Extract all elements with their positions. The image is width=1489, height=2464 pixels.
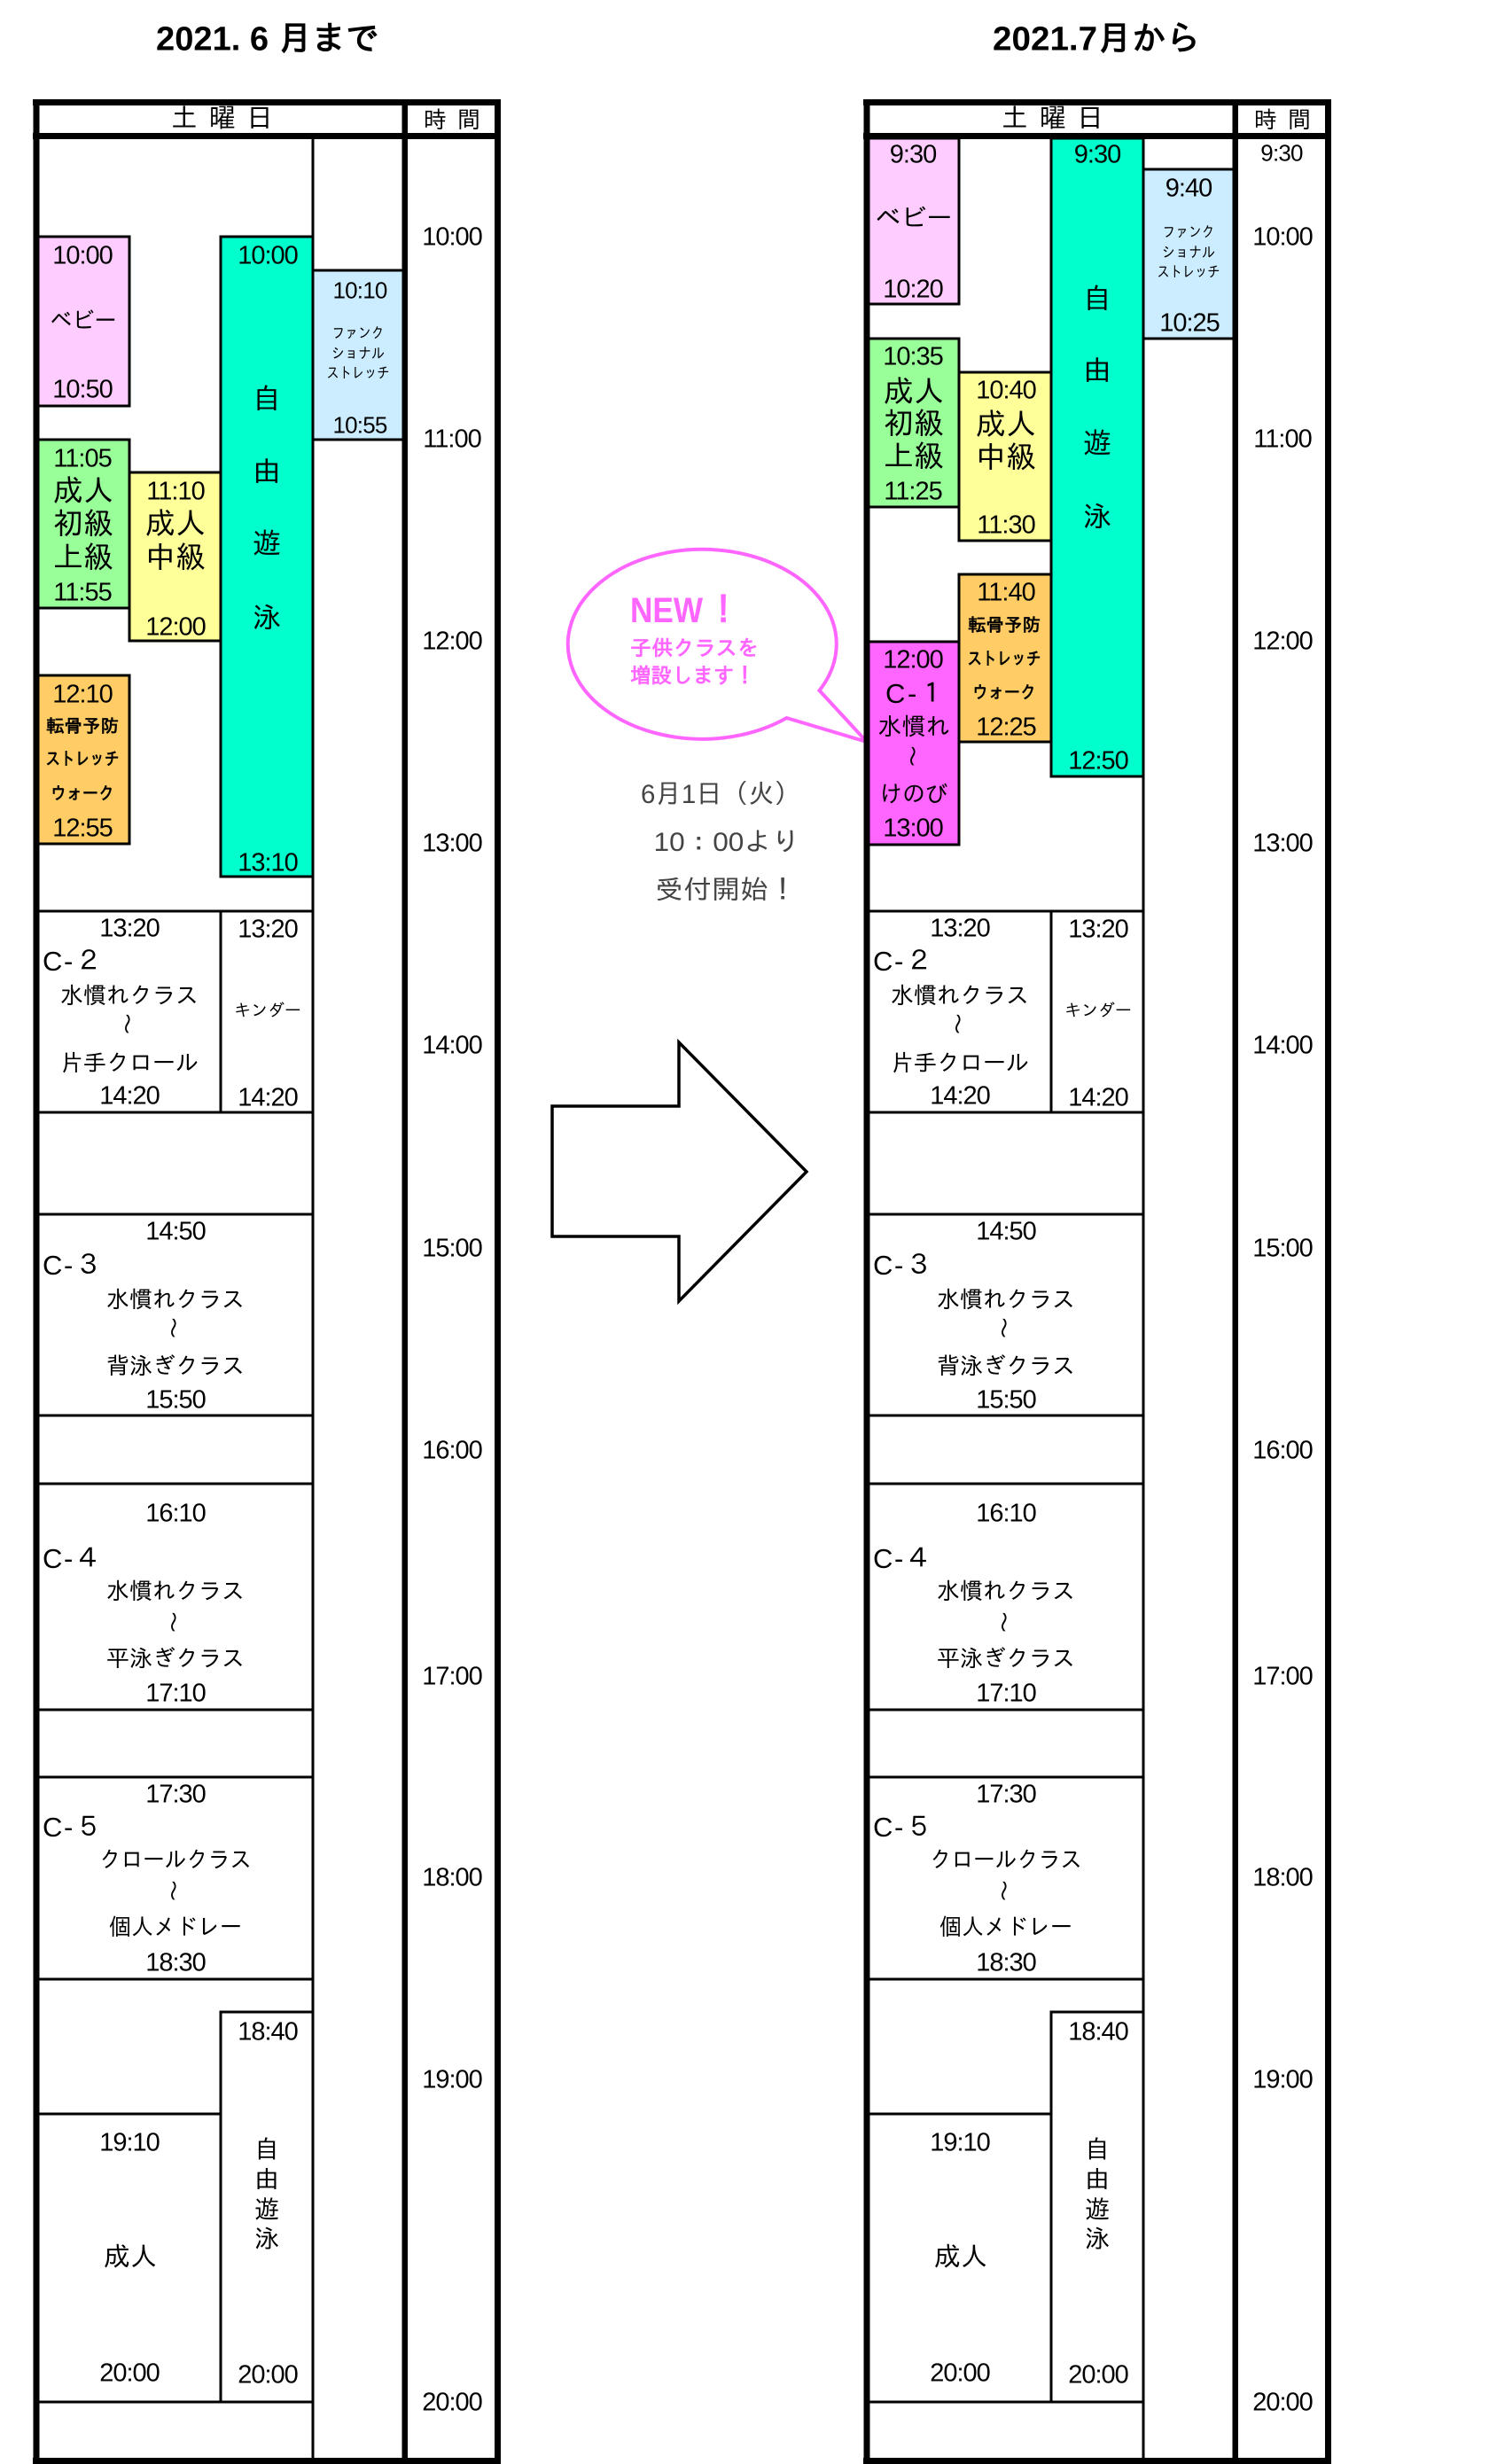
frame and header of left table <box>33 99 501 2464</box>
class: C-3: ～ <box>160 1316 186 1339</box>
class: C-2: C-２ <box>873 946 932 977</box>
class: C-1 new: ～ <box>899 745 925 768</box>
class: adult beginner and advanced: 初級 <box>884 408 944 441</box>
class: C-4: C-４ <box>873 1543 932 1574</box>
class: C-2: 水慣れクラス <box>60 982 199 1009</box>
title: until June 2021: 2021. 6 月まで <box>156 21 379 58</box>
class: evening free swim: 泳 <box>254 2225 279 2253</box>
class: baby: ベビー <box>50 308 117 334</box>
class: adult intermediate: 11:10 <box>146 477 205 505</box>
class: kinder: 13:20 <box>1068 915 1128 943</box>
panel: right timetable (from July) <box>863 99 1331 2464</box>
frame and header of left table: 曜 <box>209 105 236 133</box>
class: evening free swim: 遊 <box>254 2196 279 2223</box>
time axis right: 14:00 <box>1252 1032 1313 1060</box>
class: C-3: ～ <box>990 1316 1017 1339</box>
class: functional stretch: ショナル <box>331 346 385 362</box>
time axis left: 13:00 <box>422 830 482 858</box>
time axis left: 10:00 <box>422 223 482 252</box>
class: evening free swim: 泳 <box>1085 2225 1110 2253</box>
frame and header of right table: 時 <box>1254 106 1277 133</box>
text block: reception start date: 受付開始！ <box>655 876 797 905</box>
class: C-3: 水慣れクラス <box>937 1286 1075 1313</box>
class: C-3: 15:50 <box>976 1386 1036 1415</box>
frame and header of right table: 土 <box>1002 105 1028 133</box>
class: C-2: 片手クロール <box>891 1049 1029 1076</box>
class: adult evening: 成人 <box>104 2242 157 2273</box>
class: free swim: 9:30 <box>1074 140 1120 168</box>
time axis left: 12:00 <box>422 628 482 656</box>
class: C-3: C-３ <box>873 1250 932 1281</box>
class: adult intermediate: 10:40 <box>976 376 1036 404</box>
class: adult intermediate: 12:00 <box>145 613 206 642</box>
class: adult intermediate <box>959 372 1051 541</box>
class: baby <box>38 237 129 406</box>
class: evening free swim: 由 <box>1085 2166 1110 2193</box>
class: baby: 10:00 <box>52 241 113 269</box>
time axis right: 9:30 <box>1260 140 1303 167</box>
class: C-2: ～ <box>944 1012 971 1035</box>
class: adult evening: 20:00 <box>99 2359 160 2388</box>
callout: new children's class <box>568 550 867 742</box>
class: C-5: C-５ <box>43 1812 103 1843</box>
class: functional stretch: 10:10 <box>332 277 387 303</box>
class: C-1 new: けのび <box>879 781 948 807</box>
class: C-4: 平泳ぎクラス <box>106 1645 245 1672</box>
class: C-4 <box>38 1484 313 1710</box>
class: C-1 new: C-１ <box>885 678 946 709</box>
class: C-5: 個人メドレー <box>939 1914 1072 1940</box>
class: adult evening: 成人 <box>934 2242 987 2273</box>
time axis right: 10:00 <box>1252 223 1313 252</box>
class: evening free swim: 由 <box>254 2166 279 2193</box>
time axis left: 15:00 <box>422 1234 482 1262</box>
class: kinder <box>1051 911 1143 1112</box>
time axis left: 17:00 <box>422 1663 482 1691</box>
class: functional stretch: ストレッチ <box>1158 264 1220 280</box>
class: free swim: 12:50 <box>1068 746 1128 775</box>
class: C-2: 13:20 <box>930 915 990 943</box>
class: C-2 <box>869 911 1051 1112</box>
class: C-5: 17:30 <box>145 1780 206 1808</box>
class: C-4: 16:10 <box>976 1500 1036 1528</box>
class: free swim: 10:00 <box>238 241 298 269</box>
class: adult intermediate: 中級 <box>145 541 206 574</box>
class: fall prevention stretch walk: ストレッチ <box>968 650 1041 669</box>
class: C-5: ～ <box>990 1879 1017 1902</box>
class: fall prevention stretch walk: 転骨予防 <box>46 716 119 737</box>
class: baby: ベビー <box>876 205 952 233</box>
callout: new children's class: ！ <box>706 592 740 629</box>
class: kinder: 14:20 <box>238 1083 298 1111</box>
frame and header of right table: 曜 <box>1040 105 1066 133</box>
class: fall prevention stretch walk: 11:40 <box>977 578 1035 606</box>
class: C-5: 18:30 <box>976 1948 1036 1977</box>
divider line <box>1142 138 1145 2459</box>
class: adult beginner and advanced: 11:25 <box>884 477 942 505</box>
class: baby <box>869 138 959 304</box>
class: functional stretch <box>1143 169 1235 339</box>
class: free swim: 泳 <box>1083 501 1111 533</box>
class: C-4: C-４ <box>43 1543 103 1574</box>
class: C-4: ～ <box>160 1610 186 1634</box>
time axis right: 15:00 <box>1252 1234 1313 1262</box>
class: C-2: 片手クロール <box>60 1049 199 1076</box>
class: free swim <box>221 237 313 877</box>
frame and header of right table: 間 <box>1288 106 1311 133</box>
class: C-1 new <box>869 642 959 845</box>
class: evening free swim <box>221 2012 313 2402</box>
class: C-4: 17:10 <box>976 1679 1036 1707</box>
class: C-3: 背泳ぎクラス <box>937 1353 1075 1379</box>
class: functional stretch: 10:25 <box>1159 308 1220 337</box>
class: C-5: C-５ <box>873 1812 932 1843</box>
class: adult intermediate: 11:30 <box>977 511 1035 539</box>
class: adult evening: 19:10 <box>930 2129 990 2157</box>
class: baby: 10:20 <box>883 275 943 303</box>
frame and header of right table <box>863 99 1331 2464</box>
class: C-5 <box>869 1777 1143 1979</box>
class: evening free swim: 20:00 <box>1068 2361 1128 2390</box>
class: adult intermediate <box>129 472 221 642</box>
time axis right: 13:00 <box>1252 830 1313 858</box>
class: fall prevention stretch walk: ストレッチ <box>46 750 119 769</box>
class: adult beginner and advanced: 上級 <box>884 440 944 473</box>
time axis right: 12:00 <box>1252 628 1313 656</box>
class: C-3: 14:50 <box>976 1218 1036 1246</box>
class: C-2: ～ <box>113 1012 140 1035</box>
time axis left: 16:00 <box>422 1436 482 1464</box>
class: free swim: 由 <box>1083 355 1111 386</box>
class: C-5: 個人メドレー <box>109 1914 242 1940</box>
class: fall prevention stretch walk: 12:25 <box>976 713 1036 741</box>
class: C-2: C-２ <box>43 946 103 977</box>
class: fall prevention stretch walk <box>959 574 1051 742</box>
class: free swim: 遊 <box>253 527 281 559</box>
class: C-2: 14:20 <box>930 1081 990 1110</box>
time axis left: 20:00 <box>422 2388 482 2416</box>
class: functional stretch: ファンク <box>331 324 385 342</box>
frame and header of right table: 日 <box>1077 105 1103 133</box>
frame and header of left table: 土 <box>171 105 198 133</box>
class: free swim: 自 <box>253 383 281 415</box>
class: adult beginner and advanced: 11:55 <box>53 578 112 606</box>
class: free swim: 13:10 <box>238 849 298 877</box>
text block: reception start date <box>641 780 800 905</box>
class: C-3 <box>38 1214 313 1415</box>
class: functional stretch: ショナル <box>1162 245 1215 261</box>
right colored class blocks <box>869 138 1235 845</box>
frame and header of left table: 時 <box>424 106 447 133</box>
left colored class blocks <box>38 237 404 877</box>
class: fall prevention stretch walk: ウォーク <box>51 784 114 804</box>
time axis left: 18:00 <box>422 1863 482 1891</box>
class: fall prevention stretch walk: ウォーク <box>972 683 1036 703</box>
class: C-4: ～ <box>990 1610 1017 1634</box>
time axis left: 11:00 <box>423 425 481 454</box>
class: C-5: 17:30 <box>976 1780 1036 1808</box>
class: adult beginner and advanced: 10:35 <box>883 342 943 370</box>
class: fall prevention stretch walk <box>38 675 129 844</box>
time axis right: 20:00 <box>1252 2388 1313 2416</box>
class: baby: 9:30 <box>890 140 936 168</box>
class: adult beginner and advanced: 初級 <box>53 507 113 541</box>
class: evening free swim: 20:00 <box>238 2361 298 2390</box>
frame and header of left table: 間 <box>457 106 480 133</box>
class: adult beginner and advanced: 成人 <box>884 376 944 409</box>
class: C-3: 背泳ぎクラス <box>106 1353 245 1379</box>
class: adult beginner and advanced: 11:05 <box>53 445 112 473</box>
class: functional stretch: ファンク <box>1163 223 1214 241</box>
class: free swim <box>1051 138 1143 776</box>
callout: new children's class: NEW <box>630 591 703 630</box>
class: kinder: キンダー <box>1064 1002 1132 1021</box>
class: evening free swim <box>1051 2012 1143 2402</box>
class: C-1 new: 12:00 <box>883 645 943 674</box>
class: C-3: 14:50 <box>145 1218 206 1246</box>
class: adult beginner and advanced: 上級 <box>53 541 113 574</box>
class: C-3: 15:50 <box>145 1386 206 1415</box>
class: functional stretch: ストレッチ <box>326 365 390 381</box>
time axis right: 17:00 <box>1252 1663 1313 1691</box>
class: C-3: C-３ <box>43 1250 103 1281</box>
time axis left: 14:00 <box>422 1032 482 1060</box>
time axis left: 19:00 <box>422 2065 482 2094</box>
class: adult beginner and advanced <box>38 440 129 608</box>
text block: reception start date: 10：00より <box>654 828 799 857</box>
divider line <box>312 138 314 2459</box>
class: C-4: 水慣れクラス <box>106 1578 245 1604</box>
class: adult evening <box>869 2114 1051 2402</box>
class: adult beginner and advanced <box>869 339 959 507</box>
class: adult evening <box>38 2114 221 2402</box>
class: C-5: 18:30 <box>145 1948 206 1977</box>
time axis right: 19:00 <box>1252 2065 1313 2094</box>
class: free swim: 由 <box>253 456 281 487</box>
class: fall prevention stretch walk: 転骨予防 <box>968 615 1041 635</box>
class: C-1 new: 水慣れ <box>877 713 950 740</box>
class: C-2: 13:20 <box>99 915 160 943</box>
time axis right: 16:00 <box>1252 1436 1313 1464</box>
class: C-5: ～ <box>160 1879 186 1902</box>
class: C-2: 14:20 <box>99 1081 160 1110</box>
class: C-4: 16:10 <box>145 1500 206 1528</box>
class: free swim: 遊 <box>1083 427 1111 459</box>
class: C-4 <box>869 1484 1143 1710</box>
class: C-4: 平泳ぎクラス <box>937 1645 1075 1672</box>
time axis right <box>1252 140 1313 2416</box>
class: C-2 <box>38 911 221 1112</box>
frame and header of left table: 日 <box>246 105 273 133</box>
class: baby: 10:50 <box>52 376 113 404</box>
class: functional stretch: 10:55 <box>332 411 387 438</box>
class: adult intermediate: 成人 <box>145 507 206 541</box>
class: C-4: 水慣れクラス <box>937 1578 1075 1604</box>
class: free swim: 自 <box>1083 283 1111 315</box>
class: evening free swim: 遊 <box>1085 2196 1110 2223</box>
panel: left timetable (until June) <box>33 99 501 2464</box>
class: adult evening: 19:10 <box>99 2129 160 2157</box>
time axis right: 11:00 <box>1253 425 1312 454</box>
class: C-2: 水慣れクラス <box>891 982 1029 1009</box>
class: evening free swim: 自 <box>1085 2136 1110 2163</box>
class: kinder <box>221 911 313 1112</box>
class: kinder: キンダー <box>234 1002 301 1021</box>
class: C-4: 17:10 <box>145 1679 206 1707</box>
class: kinder: 13:20 <box>238 915 298 943</box>
class: fall prevention stretch walk: 12:10 <box>52 681 113 709</box>
class: C-5: クロールクラス <box>930 1846 1082 1873</box>
callout: new children's class: 増設します！ <box>630 665 755 688</box>
class: functional stretch: 9:40 <box>1165 174 1212 202</box>
class: functional stretch <box>313 270 404 440</box>
class: kinder: 14:20 <box>1068 1083 1128 1111</box>
class: evening free swim: 18:40 <box>238 2017 298 2046</box>
time axis right: 18:00 <box>1252 1863 1313 1891</box>
class: adult beginner and advanced: 成人 <box>53 475 113 509</box>
callout: new children's class: 子供クラスを <box>630 636 759 661</box>
class: evening free swim: 自 <box>254 2136 279 2163</box>
text block: reception start date: 6月1日（火） <box>641 780 800 809</box>
class: C-3 <box>869 1214 1143 1415</box>
time axis left <box>422 223 482 2416</box>
class: fall prevention stretch walk: 12:55 <box>52 814 113 842</box>
class: adult intermediate: 成人 <box>976 408 1036 441</box>
class: C-1 new: 13:00 <box>883 814 943 842</box>
class: adult evening: 20:00 <box>930 2359 990 2388</box>
title: from July 2021: 2021.7月から <box>993 21 1200 58</box>
class: adult intermediate: 中級 <box>976 441 1036 475</box>
arrow: before to after <box>552 1042 807 1301</box>
class: free swim: 泳 <box>253 602 281 634</box>
class: evening free swim: 18:40 <box>1068 2017 1128 2046</box>
class: C-5 <box>38 1777 313 1979</box>
class: C-3: 水慣れクラス <box>106 1286 245 1313</box>
class: C-5: クロールクラス <box>99 1846 252 1873</box>
